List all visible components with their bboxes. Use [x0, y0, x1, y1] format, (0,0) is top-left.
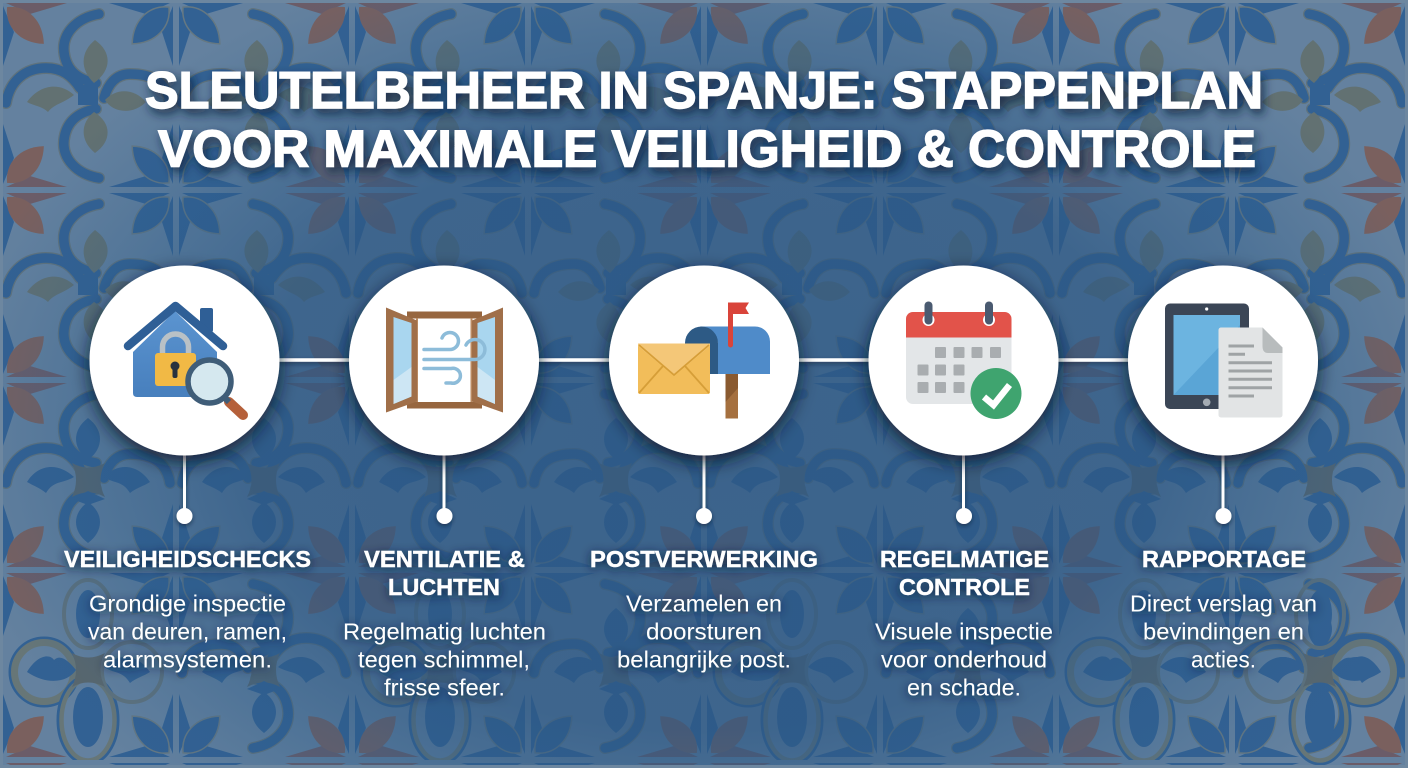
- text: postverwerking: [590, 546, 818, 672]
- title: SLEUTELBEHEER IN SPANJE: STAPPENPLAN: [145, 62, 1263, 120]
- step 2: ventilatie circle: [349, 266, 539, 456]
- text: postverwerking: Verzamelen en: [626, 590, 782, 616]
- text: rapportage: acties.: [1191, 646, 1256, 672]
- title: [145, 62, 1263, 178]
- text: ventilatie en luchten: Regelmatig luchten: [343, 618, 546, 644]
- text: regelmatige controle: REGELMATIGE: [880, 546, 1049, 572]
- step 4: regelmatige controle circle: [868, 266, 1058, 456]
- step 1: veiligheidschecks circle: [90, 266, 280, 456]
- text: rapportage: Direct verslag van: [1130, 590, 1317, 616]
- icon: calendar with check: [906, 302, 1022, 419]
- step 3: postverwerking circle: [609, 266, 799, 456]
- text: postverwerking: POSTVERWERKING: [590, 546, 818, 572]
- text: regelmatige controle: Visuele inspectie: [875, 618, 1053, 644]
- text: veiligheidschecks: van deuren, ramen,: [88, 618, 287, 644]
- icon: open window with wind: [386, 308, 503, 412]
- connector lines: [176, 360, 1232, 524]
- text: postverwerking: doorsturen: [646, 618, 762, 644]
- icon: tablet and document: [1165, 304, 1282, 418]
- text: ventilatie en luchten: [343, 546, 546, 700]
- text: regelmatige controle: voor onderhoud: [881, 646, 1047, 672]
- text: veiligheidschecks: alarmsystemen.: [103, 646, 272, 672]
- text: regelmatige controle: en schade.: [907, 674, 1021, 700]
- icon: mailbox and envelope: [638, 302, 770, 418]
- text: veiligheidschecks: [64, 546, 311, 672]
- text: ventilatie en luchten: frisse sfeer.: [384, 674, 505, 700]
- text: rapportage: RAPPORTAGE: [1142, 546, 1306, 572]
- text: ventilatie en luchten: tegen schimmel,: [358, 646, 530, 672]
- text: ventilatie en luchten: VENTILATIE &: [364, 546, 525, 572]
- step 5: rapportage circle: [1128, 266, 1318, 456]
- text: ventilatie en luchten: LUCHTEN: [388, 574, 500, 600]
- text: regelmatige controle: [875, 546, 1053, 700]
- text: veiligheidschecks: Grondige inspectie: [89, 590, 286, 616]
- text: rapportage: bevindingen en: [1143, 618, 1304, 644]
- text: regelmatige controle: CONTROLE: [899, 574, 1030, 600]
- text: postverwerking: belangrijke post.: [617, 646, 791, 672]
- icon: house with lock and magnifier: [128, 306, 243, 415]
- title: VOOR MAXIMALE VEILIGHEID & CONTROLE: [158, 120, 1256, 178]
- text: rapportage: [1130, 546, 1317, 672]
- text: veiligheidschecks: VEILIGHEIDSCHECKS: [64, 546, 311, 572]
